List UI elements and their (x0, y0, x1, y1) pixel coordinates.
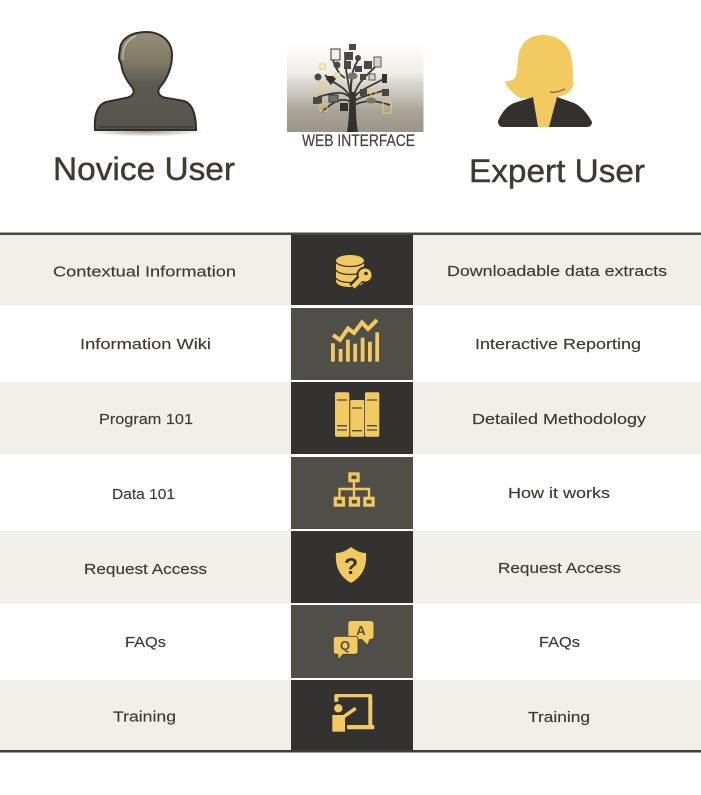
row 4 (112, 457, 610, 529)
icon: tree of web icons (313, 44, 391, 132)
expert: Interactive Reporting: Interactive Reporting (475, 336, 641, 353)
panel: web interface image (287, 43, 424, 150)
row 5 (0, 531, 701, 604)
novice: Training: Training (113, 708, 176, 726)
image background (287, 43, 424, 132)
expert: Training: Training (528, 709, 590, 726)
heading: Novice User: Novice User (53, 151, 235, 187)
row 6 (125, 605, 580, 678)
expert: Detailed Methodology: Detailed Methodology (472, 411, 647, 428)
novice: Program 101: Program 101 (99, 411, 193, 428)
icon: org chart (334, 472, 375, 507)
bottom rule (0, 750, 701, 752)
expert: Request Access: Request Access (498, 560, 621, 577)
icon: question and answer bubbles: A (356, 623, 366, 638)
icon: question and answer bubbles: Q (340, 638, 350, 653)
top rule (0, 232, 701, 235)
icon: question and answer bubbles (333, 621, 374, 660)
novice: Data 101: Data 101 (112, 486, 175, 503)
row 3 (0, 382, 701, 454)
icon: shield with question mark: ? (344, 553, 358, 579)
icon: books (335, 392, 379, 437)
row 2 (80, 308, 641, 380)
icon: teacher at board (332, 694, 374, 732)
panel: expert user header (469, 35, 645, 189)
novice: Request Access: Request Access (84, 561, 207, 578)
icon: expert user silhouette (498, 35, 592, 127)
icon: database with key (336, 255, 374, 287)
expert: FAQs: FAQs (539, 634, 580, 651)
novice: Information Wiki: Information Wiki (80, 336, 211, 353)
panel: comparison table (0, 232, 701, 752)
novice: Contextual Information: Contextual Information (53, 264, 236, 280)
row 7 (0, 680, 701, 752)
heading: Expert User: Expert User (469, 153, 645, 189)
icon: shield with question mark (336, 547, 366, 583)
panel: novice user header (53, 32, 235, 187)
icon: novice user silhouette (88, 32, 204, 136)
novice: FAQs: FAQs (125, 634, 166, 651)
row 1 (0, 235, 701, 306)
expert: How it works: How it works (508, 485, 610, 502)
expert: Downloadable data extracts: Downloadable data extracts (447, 263, 667, 280)
caption: WEB INTERFACE: WEB INTERFACE (302, 131, 415, 150)
icon: bar and line chart (331, 320, 379, 362)
